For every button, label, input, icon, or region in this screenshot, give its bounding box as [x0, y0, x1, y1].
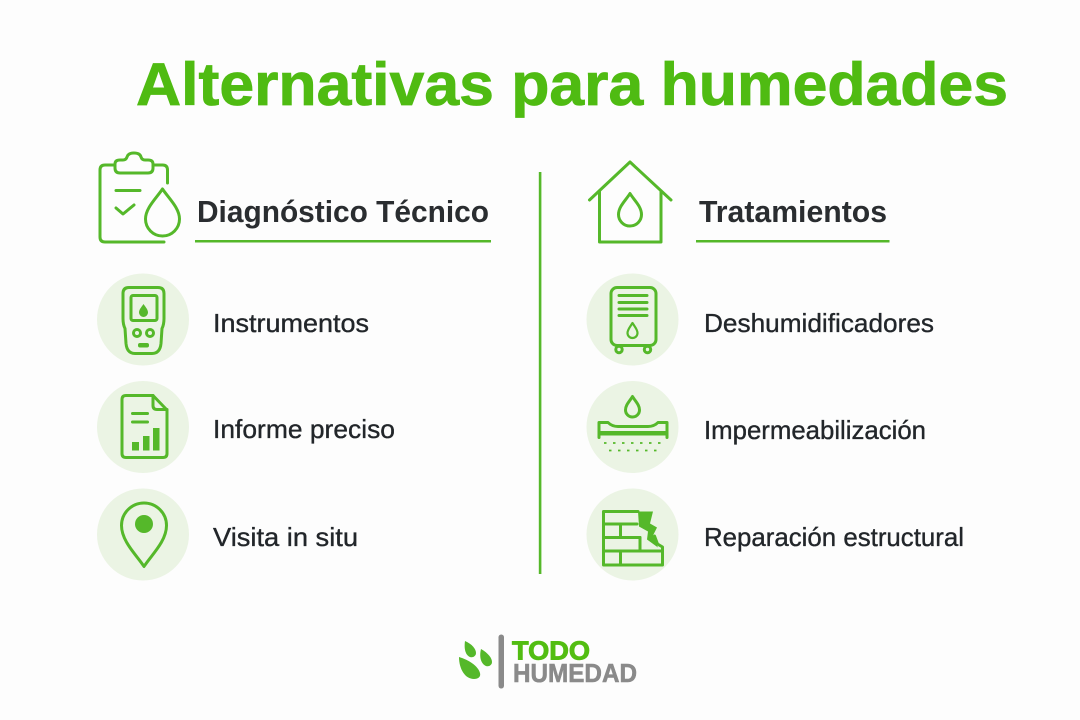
- icon: dehumidifier: [611, 288, 656, 353]
- heading: diagnostico tecnico: Diagnóstico Técnico: [197, 194, 489, 229]
- item: visita in situ: Visita in situ: [213, 522, 358, 552]
- item: instrumentos: [97, 274, 369, 366]
- panel: tratamientos: [586, 162, 964, 580]
- heading underline: [696, 240, 890, 242]
- icon: report document: [122, 396, 167, 458]
- item: instrumentos: Instrumentos: [213, 308, 369, 338]
- item: informe preciso: [97, 381, 395, 473]
- item: deshumidificadores: [586, 274, 934, 366]
- panel: diagnostico tecnico: [97, 153, 491, 580]
- item: reparacion estructural: Reparación estructural: [704, 522, 964, 552]
- item: impermeabilizacion: [586, 381, 926, 473]
- icon: waterproof layer: [599, 396, 667, 450]
- logo word: humedad: HUMEDAD: [513, 658, 637, 688]
- logo word: todo: TODO: [512, 636, 590, 666]
- heading underline: [195, 240, 491, 242]
- item: visita in situ: [97, 488, 358, 580]
- column divider: [539, 172, 541, 574]
- icon: location pin: [122, 503, 166, 566]
- item: impermeabilizacion: Impermeabilización: [704, 415, 926, 445]
- icon: house with drop: [590, 162, 671, 242]
- heading: tratamientos: Tratamientos: [699, 194, 887, 229]
- item: reparacion estructural: [586, 488, 964, 580]
- icon: logo drops: [459, 641, 492, 679]
- logo: todo humedad: [459, 634, 637, 688]
- title: Alternativas para humedades: [136, 51, 1008, 118]
- icon: moisture meter: [123, 288, 164, 354]
- item: deshumidificadores: Deshumidificadores: [704, 308, 934, 338]
- icon: cracked brick wall: [604, 512, 662, 565]
- item: informe preciso: Informe preciso: [213, 414, 395, 444]
- logo divider bar: [498, 634, 504, 688]
- icon: clipboard with drop: [100, 153, 180, 242]
